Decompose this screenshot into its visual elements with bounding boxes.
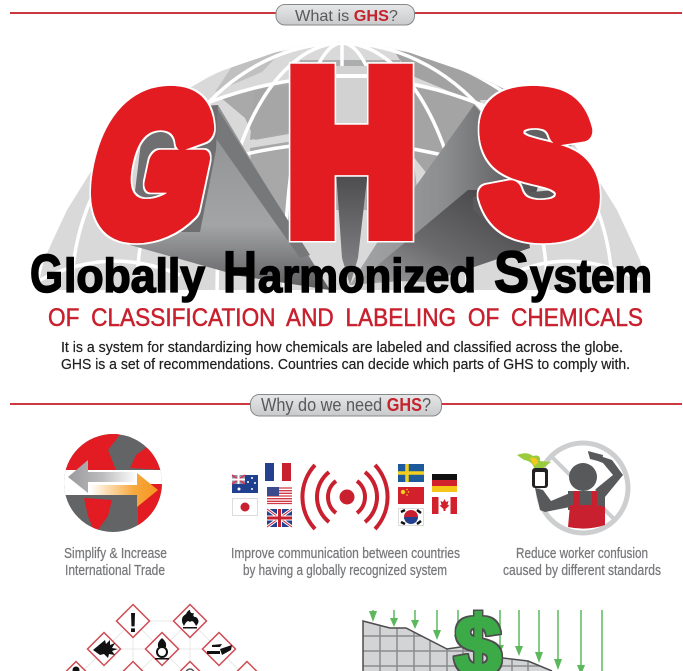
caption: worker bbox=[503, 545, 661, 579]
hazard diamond row: partial lower diamonds bbox=[60, 662, 264, 671]
icon: radio waves with center dot bbox=[302, 465, 388, 529]
hazard diamond: corrosion bbox=[202, 632, 236, 666]
flag: Germany bbox=[432, 474, 457, 492]
title: Globally Harmonized System: H bbox=[223, 240, 257, 305]
title: Globally Harmonized System: G bbox=[30, 244, 63, 304]
chart: falling green arrows bbox=[369, 610, 602, 671]
GHS big red letters: S bbox=[474, 59, 602, 271]
flag: Canada bbox=[432, 497, 457, 514]
title: Globally Harmonized System: S bbox=[494, 240, 529, 305]
globe dome behind the GHS letters bbox=[40, 41, 643, 290]
flag: UK bbox=[267, 509, 292, 527]
title: Globally Harmonized System bbox=[30, 240, 652, 305]
hazard pictogram grid lines bbox=[76, 621, 247, 671]
section header: Why do we need GHS? bbox=[10, 394, 682, 416]
GHS big red letters bbox=[74, 27, 602, 277]
caption: communication: Improve communication between countries bbox=[231, 545, 460, 562]
flag: Australia bbox=[232, 475, 258, 493]
section header: What is GHS? bbox=[10, 4, 682, 25]
caption: communication: by having a globally recognized system bbox=[243, 562, 447, 579]
description text bbox=[61, 339, 630, 373]
chart: declining cost area with grid bbox=[362, 620, 552, 671]
GHS big red letters: G bbox=[74, 59, 232, 271]
title: Globally Harmonized System: ystem bbox=[530, 249, 652, 302]
description text: GHS is a set of recommendations. Countries can decide which parts of GHS to comply with. bbox=[61, 356, 630, 373]
flag: France bbox=[265, 463, 291, 481]
flag: China bbox=[398, 487, 424, 504]
flag: Japan bbox=[232, 498, 258, 516]
section header: Why do we need GHS?: Why do we need GHS? bbox=[261, 395, 431, 415]
hazard diamond: flame over circle bbox=[146, 632, 178, 666]
flag: Sweden bbox=[398, 464, 424, 482]
caption: trade bbox=[64, 545, 167, 579]
description text: It is a system for standardizing how chemicals are labeled and classified across the globe. bbox=[61, 339, 623, 356]
caption: trade: Simplify & Increase bbox=[64, 545, 167, 562]
caption: communication bbox=[231, 545, 460, 579]
hazard diamond: exclamation mark bbox=[116, 604, 150, 638]
hazard diamond: explosion bbox=[88, 632, 120, 666]
hazard diamond: exclamation mark: ! bbox=[128, 607, 138, 638]
icon: confused worker with prohibition ring bbox=[517, 443, 628, 533]
title: Globally Harmonized System: lobally bbox=[64, 249, 205, 302]
caption: worker: Reduce worker confusion bbox=[516, 545, 648, 562]
caption: trade: International Trade bbox=[65, 562, 165, 579]
section header: What is GHS?: What is GHS? bbox=[295, 8, 398, 25]
flag: USA bbox=[267, 487, 292, 504]
flag: South Korea bbox=[398, 508, 424, 526]
icon: trade globe with arrows bbox=[64, 434, 162, 532]
GHS big red letters: H bbox=[288, 27, 415, 277]
title: Globally Harmonized System: armonized bbox=[258, 249, 476, 302]
GHS letter extrusion shadows bbox=[130, 66, 584, 290]
hazard diamond: flame bbox=[174, 604, 206, 638]
